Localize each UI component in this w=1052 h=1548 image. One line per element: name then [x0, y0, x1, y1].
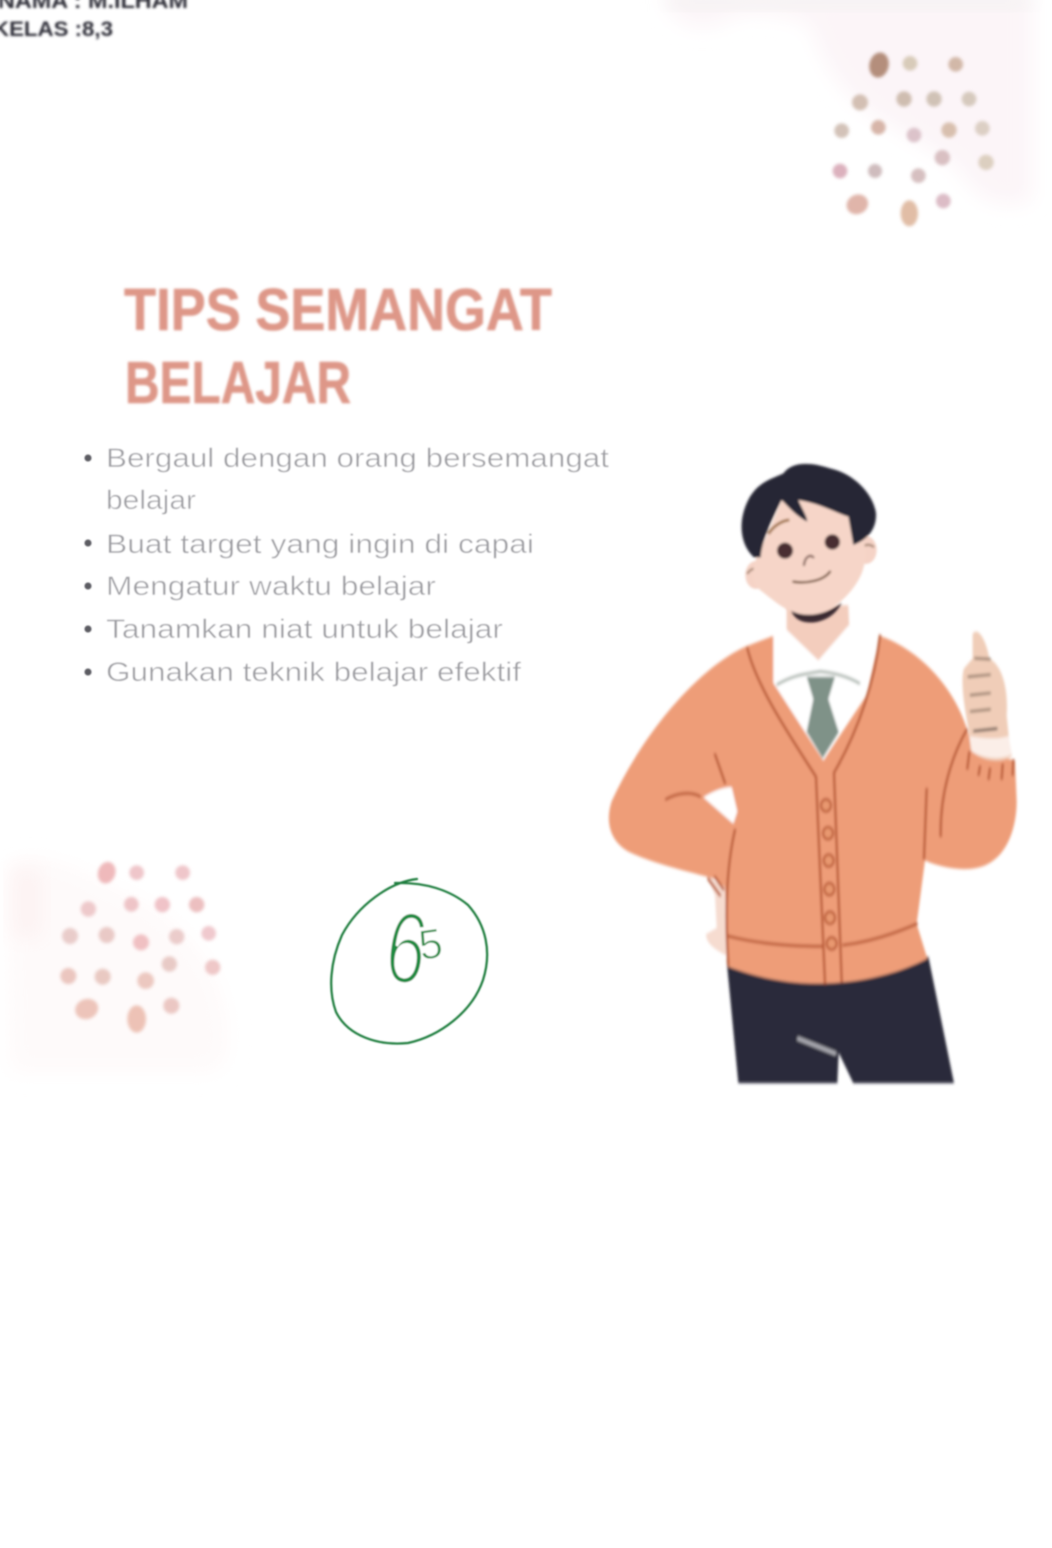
- head: [742, 464, 877, 623]
- hair: [742, 464, 876, 557]
- title: BELAJAR: [125, 350, 351, 416]
- cardigan: [609, 636, 1017, 984]
- tie: [807, 677, 839, 758]
- smile: [793, 572, 830, 582]
- eyebrow: [768, 520, 789, 534]
- chin shadow: [791, 602, 842, 623]
- nose: [804, 556, 813, 565]
- tips list: belajar: [106, 485, 196, 515]
- tips list: Gunakan teknik belajar efektif: [106, 657, 522, 687]
- tips list: [84, 443, 610, 687]
- face: [753, 497, 865, 616]
- eyes: [777, 543, 793, 559]
- tips list: Bergaul dengan orang bersemangat: [106, 443, 610, 473]
- neck: [787, 605, 850, 662]
- grade text: 6: [379, 888, 435, 1007]
- grade text: 5: [416, 919, 445, 969]
- decoration: top right blob and dots: [660, 0, 1032, 226]
- tips list: Tanamkan niat untuk belajar: [106, 614, 503, 644]
- cardigan buttons: [821, 799, 837, 950]
- student name and class: [0, 0, 188, 41]
- left hand on hip: [706, 875, 728, 957]
- thumbs up hand: [963, 632, 1012, 761]
- trousers: [727, 957, 954, 1083]
- illustration: student giving thumbs up: [609, 464, 1017, 1083]
- shirt and collar: [770, 626, 867, 760]
- body: [609, 605, 1017, 1083]
- tips list: Buat target yang ingin di capai: [106, 529, 534, 559]
- tips list: Mengatur waktu belajar: [106, 571, 436, 601]
- handwritten grade mark: [331, 879, 487, 1044]
- title: TIPS SEMANGAT: [124, 277, 552, 343]
- ears: [745, 561, 767, 589]
- title: [124, 277, 552, 416]
- circle around grade: [331, 879, 487, 1044]
- decoration: bottom left blob and dots: [8, 859, 227, 1072]
